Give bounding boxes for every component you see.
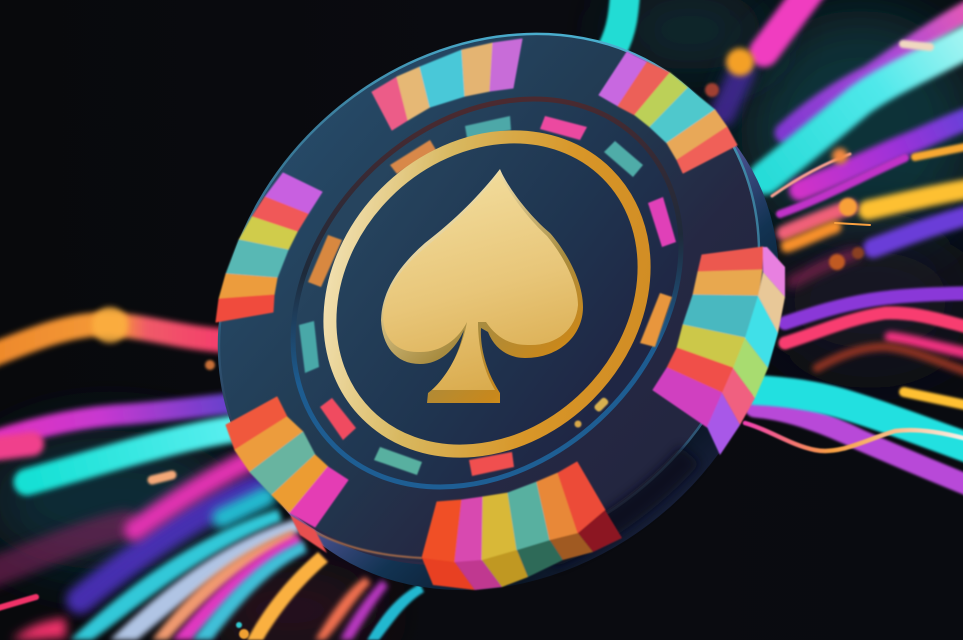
rim stripes: top-left block	[372, 39, 522, 130]
neon streaks: left side	[0, 307, 266, 609]
inner track dashes	[299, 116, 676, 476]
chip side wall	[280, 145, 778, 590]
rim stripes: top-right block	[599, 52, 737, 173]
rim stripes: bottom block with side faces	[422, 462, 622, 590]
rim stripes: left block	[216, 173, 322, 322]
poker chip	[214, 32, 786, 591]
gold ring	[323, 130, 651, 458]
gold spade icon	[381, 169, 583, 403]
chip face	[218, 32, 760, 565]
neon streaks: bottom fan	[12, 509, 424, 640]
recessed inner track	[290, 96, 683, 490]
neon streaks: top	[612, 0, 818, 113]
rim stripes: right block with side faces	[653, 247, 785, 455]
neon streaks: right side	[745, 5, 963, 490]
rim stripes: lower-left block	[226, 397, 348, 553]
